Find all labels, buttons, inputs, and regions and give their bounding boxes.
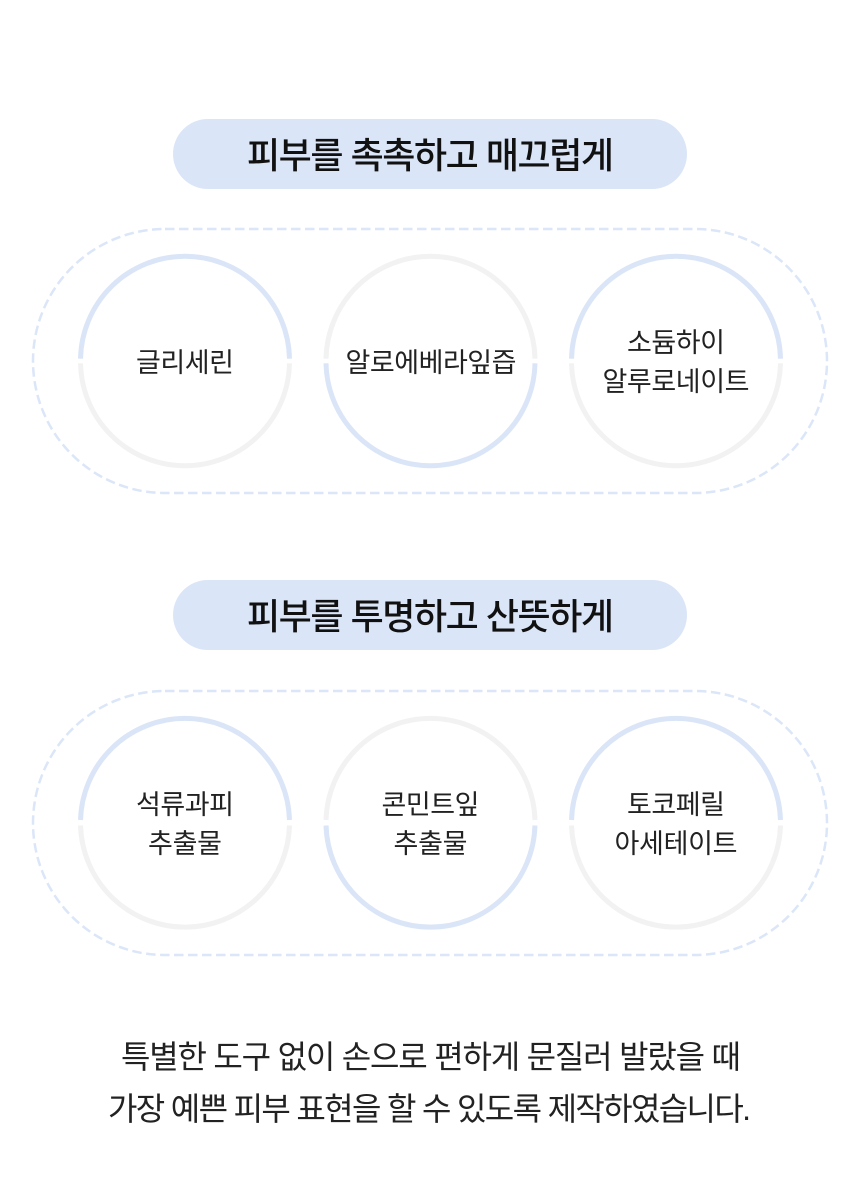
heading pill: clarity: 피부를 투명하고 산뜻하게	[247, 596, 614, 637]
heading pill: moisture	[173, 119, 687, 189]
ingredient circle: tocopheryl acetate	[572, 718, 780, 927]
ingredient circle: glycerin: 글리세린	[136, 348, 234, 378]
ingredient circle: sodium hyaluronate: 알루로네이트	[602, 367, 750, 397]
panel: clarity ingredients	[33, 691, 827, 955]
heading pill: clarity	[173, 580, 687, 650]
ingredient circle: glycerin	[81, 256, 289, 466]
heading pill: moisture: 피부를 촉촉하고 매끄럽게	[247, 135, 614, 176]
ingredient circle: tocopheryl acetate: 토코페릴	[627, 790, 725, 820]
closing description text	[108, 1039, 751, 1127]
ingredient circle: sodium hyaluronate	[572, 256, 780, 466]
closing description text: 특별한 도구 없이 손으로 편하게 문질러 발랐을 때	[121, 1039, 741, 1075]
ingredient circle: sodium hyaluronate: 소듐하이	[627, 328, 725, 358]
panel: moisture ingredients	[33, 229, 827, 493]
ingredient circle: comfrey leaf extract	[326, 718, 535, 927]
ingredient circle: aloe vera leaf	[326, 256, 535, 466]
ingredient circle: comfrey leaf extract: 콘민트잎	[382, 790, 480, 820]
ingredient circle: pomegranate peel extract	[81, 718, 289, 927]
ingredient circle: aloe vera leaf: 알로에베라잎즙	[346, 348, 516, 378]
ingredient circle: pomegranate peel extract: 추출물	[148, 829, 222, 859]
closing description text: 가장 예쁜 피부 표현을 할 수 있도록 제작하였습니다.	[108, 1091, 751, 1127]
ingredient circle: comfrey leaf extract: 추출물	[394, 829, 468, 859]
ingredient circle: tocopheryl acetate: 아세테이트	[614, 829, 738, 859]
ingredient circle: pomegranate peel extract: 석류과피	[136, 790, 234, 820]
